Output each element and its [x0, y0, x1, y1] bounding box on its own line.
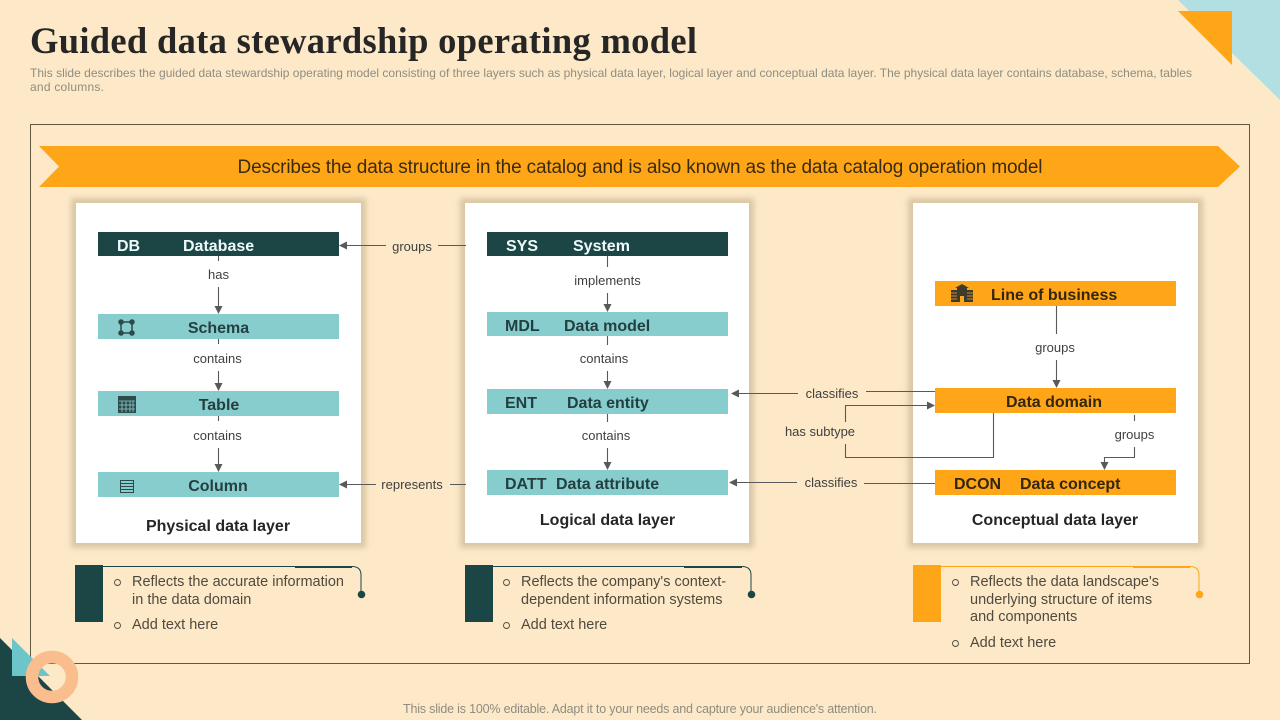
connector: groups: [339, 239, 466, 254]
text block: conceptual notes: Reflects the data landscape's: [970, 574, 1159, 590]
connector: has subtype: [785, 402, 994, 458]
panel: logical data layer: [460, 198, 754, 548]
bar: data entity: Data entity: [567, 395, 649, 412]
bar: system: [487, 232, 728, 256]
arrow: groups: [1035, 306, 1075, 388]
arrow: groups: [1100, 415, 1155, 470]
caption: conceptual data layer: Conceptual data layer: [972, 512, 1138, 529]
arrow: contains: contains: [582, 428, 631, 443]
text block: physical notes: Add text here: [132, 617, 218, 633]
bar: database: DB: [117, 238, 140, 255]
bar: line of business: [935, 281, 1176, 306]
bar: data concept: DCON: [954, 476, 1001, 493]
text block: logical notes: Add text here: [521, 617, 607, 633]
icon: column: [120, 480, 134, 492]
text block: physical notes: in the data domain: [132, 592, 251, 608]
connector: classifies bottom: classifies: [805, 475, 858, 490]
bar: column: Column: [188, 478, 248, 495]
bar: table: [98, 391, 339, 416]
arrow: groups: groups: [1115, 427, 1155, 442]
decoration: top right corner triangles: [1178, 0, 1280, 100]
bar: data concept: [935, 470, 1176, 495]
arrow: has: has: [208, 267, 229, 282]
decoration: bottom left shapes: [0, 638, 82, 720]
marker: [75, 565, 103, 622]
bar: schema: Schema: [188, 320, 249, 337]
text block: logical notes: [465, 565, 755, 633]
connector: represents: [339, 477, 466, 492]
arrow: implements: [574, 256, 641, 312]
text block: conceptual notes: underlying structure of items: [970, 592, 1152, 608]
text block: conceptual notes: Add text here: [970, 635, 1056, 651]
text block: conceptual notes: [913, 565, 1203, 651]
bar: data model: [487, 312, 728, 336]
bar: line of business: Line of business: [991, 287, 1117, 304]
bar: data model: Data model: [564, 318, 650, 335]
arrow: contains: [193, 339, 242, 391]
marker: [465, 565, 493, 622]
text block: conceptual notes: and components: [970, 609, 1077, 625]
bar: data model: MDL: [505, 318, 540, 335]
bar: schema: [98, 314, 339, 339]
marker: [913, 565, 941, 622]
bar: data attribute: DATT: [505, 476, 547, 493]
arrow: contains: contains: [193, 428, 242, 443]
arrow: implements: implements: [574, 273, 641, 288]
bar: system: SYS: [506, 238, 538, 255]
title: Guided data stewardship operating model: [30, 20, 697, 61]
subtitle text block: This slide describes the guided data stewardship operating model consisting of three layers such as physical data layer, logical layer and conceptual data layer. The physical data layer contains database, schema, tables: [30, 66, 1192, 80]
panel: conceptual data layer: [908, 198, 1203, 548]
text block: logical notes: Reflects the company's context-: [521, 574, 726, 590]
arrow: contains: contains: [580, 351, 629, 366]
bar: data domain: [935, 388, 1176, 413]
panel: physical data layer: [71, 198, 366, 548]
bar: data domain: Data domain: [1006, 394, 1102, 411]
bar: column: [98, 472, 339, 497]
subtitle text block: [30, 66, 1192, 94]
bar: data concept: Data concept: [1020, 476, 1121, 493]
caption: physical data layer: Physical data layer: [146, 518, 290, 535]
bar: data attribute: Data attribute: [556, 476, 659, 493]
bar: data entity: ENT: [505, 395, 537, 412]
arrow: contains: [580, 336, 629, 389]
connector: has subtype: has subtype: [785, 424, 855, 439]
main frame: [30, 124, 1250, 664]
icon: schema: [119, 320, 134, 335]
icon: buildings: [951, 284, 973, 302]
connector: classifies top: [731, 386, 935, 401]
leader line: [493, 566, 755, 598]
arrow: has: [208, 256, 229, 314]
subtitle text block: and columns.: [30, 80, 104, 94]
connector: groups: groups: [392, 239, 432, 254]
bar: system: System: [573, 238, 630, 255]
banner: [39, 146, 1240, 187]
bar: database: [98, 232, 339, 256]
connector: represents: represents: [381, 477, 443, 492]
caption: logical data layer: Logical data layer: [540, 512, 675, 529]
text block: logical notes: dependent information systems: [521, 592, 722, 608]
bar: data attribute: [487, 470, 728, 495]
arrow: contains: contains: [193, 351, 242, 366]
bar: data entity: [487, 389, 728, 414]
leader line: [103, 566, 365, 598]
banner: Describes the data structure in the catalog and is also known as the data catalog operation model: [238, 157, 1042, 178]
arrow: groups: groups: [1035, 340, 1075, 355]
icon: table: [118, 396, 136, 413]
connector: classifies top: classifies: [806, 386, 859, 401]
bar: database: Database: [183, 238, 254, 255]
connector: classifies bottom: [729, 475, 935, 490]
arrow: contains: [582, 414, 631, 470]
text block: physical notes: Reflects the accurate information: [132, 574, 344, 590]
footer note: This slide is 100% editable. Adapt it to your needs and capture your audience's attention.: [403, 702, 877, 716]
arrow: contains: [193, 416, 242, 472]
bar: table: Table: [199, 397, 239, 414]
leader line: [941, 566, 1203, 598]
text block: physical notes: [75, 565, 365, 633]
